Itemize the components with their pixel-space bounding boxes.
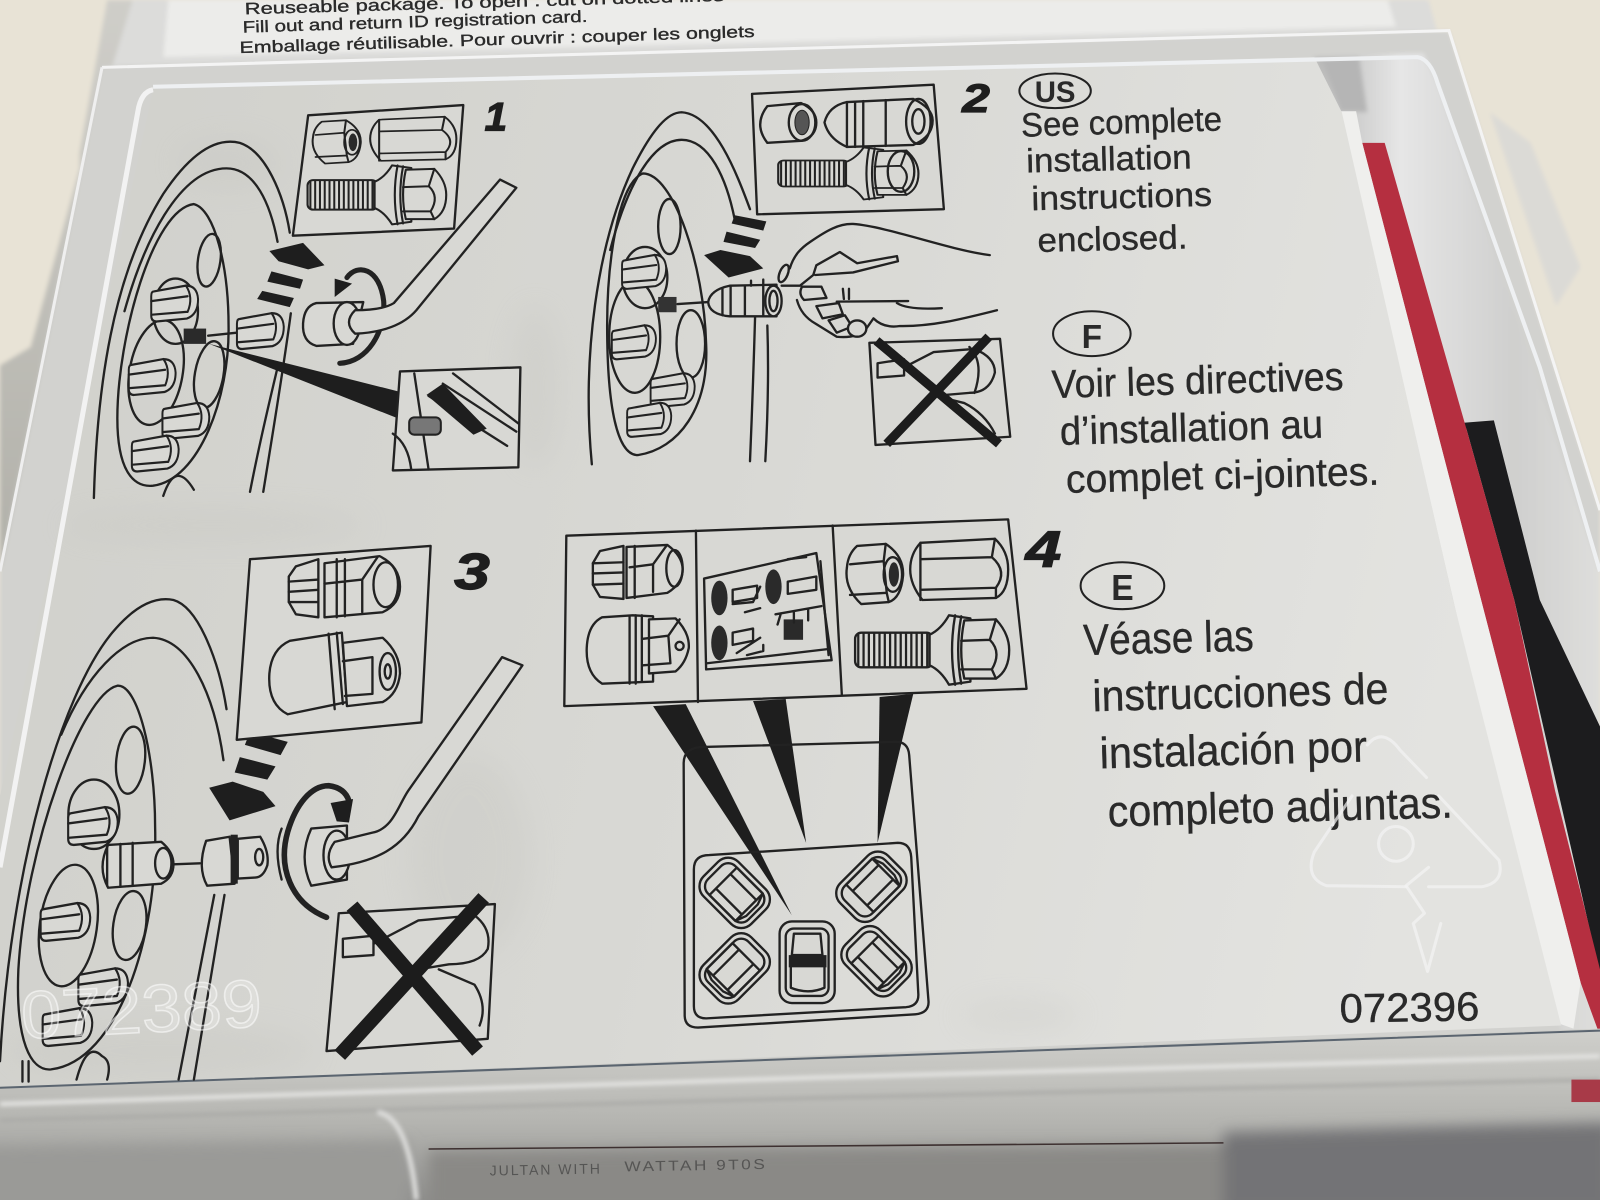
instruction booklet xyxy=(704,553,832,669)
badge: F xyxy=(1053,311,1131,356)
plastic edge highlights xyxy=(0,31,1600,867)
Spanish instructions: Véase las xyxy=(1083,612,1254,665)
badge: US: US xyxy=(1035,76,1076,109)
band edge highlight xyxy=(0,1031,1600,1088)
inset: key parts xyxy=(237,546,431,740)
pointer to detail xyxy=(209,344,400,418)
French instructions: complet ci-jointes. xyxy=(1065,450,1380,502)
step number 2: 2 xyxy=(961,77,990,121)
stud and lock xyxy=(658,280,782,316)
panel 2: install new lock by hand xyxy=(589,77,1010,464)
English instructions: installation xyxy=(1026,139,1192,180)
inset: lock parts xyxy=(752,85,944,214)
lower plastic band xyxy=(0,1029,1600,1200)
Spanish instructions: instalación por xyxy=(1099,722,1368,778)
arrow: outward xyxy=(257,243,324,307)
paper mottling xyxy=(10,139,1082,1078)
second paper sheet xyxy=(1341,111,1581,1029)
Spanish instructions: completo adjuntas. xyxy=(1107,779,1453,837)
band streaks and dark label strip xyxy=(0,1056,1600,1200)
panel 4: store key and parts xyxy=(564,519,1061,1028)
badge: F: F xyxy=(1082,319,1102,356)
French instructions xyxy=(1051,311,1380,502)
panel 3: tighten lock with key xyxy=(0,543,522,1082)
Spanish instructions xyxy=(1081,562,1453,837)
arrow: inward xyxy=(209,732,288,820)
step number 4: 4 xyxy=(1024,520,1061,577)
bottom label text seen through plastic: JULTAN WITH xyxy=(490,1162,602,1180)
French instructions: Voir les directives xyxy=(1051,355,1344,407)
wrench with socket xyxy=(303,180,516,363)
no impact wrench xyxy=(327,898,495,1055)
panel 1: remove factory lug nut xyxy=(94,96,520,498)
black package behind xyxy=(1454,420,1600,974)
removed lug and stud xyxy=(184,313,284,349)
English instructions: enclosed. xyxy=(1037,219,1188,260)
top sheet text xyxy=(239,0,755,57)
wheel 3 xyxy=(0,599,227,1082)
red backing strip xyxy=(1362,143,1600,1036)
bottom label text seen through plastic xyxy=(490,1157,767,1180)
part number: 072396 xyxy=(1339,984,1480,1031)
badge: E: E xyxy=(1111,568,1134,608)
English instructions: See complete xyxy=(1021,101,1223,145)
step number 3: 3 xyxy=(454,543,490,600)
step number 1: 1 xyxy=(485,96,507,140)
embossed recycling triangle xyxy=(1311,737,1500,971)
top sheet text: Fill out and return ID registration card. xyxy=(242,8,588,37)
inset: wheel detail xyxy=(393,367,520,470)
arrow: inward xyxy=(704,215,766,278)
top sheet text: Emballage réutilisable. Pour ouvrir : couper les onglets xyxy=(239,23,755,57)
Spanish instructions: instrucciones de xyxy=(1092,664,1389,721)
bottom label text seen through plastic: WATTAH 9T0S xyxy=(624,1157,767,1175)
hand xyxy=(776,224,997,337)
embossed mold number: 072389 xyxy=(19,966,264,1054)
lock on stud with key xyxy=(103,835,268,888)
English instructions xyxy=(1019,73,1223,260)
wrench with rotation arrow xyxy=(278,657,522,917)
parts strip xyxy=(564,519,1027,706)
French instructions: d’installation au xyxy=(1059,403,1324,454)
inset: parts xyxy=(293,105,463,236)
wheel 2 xyxy=(589,112,768,464)
badge: E xyxy=(1081,562,1164,609)
badge: US xyxy=(1019,73,1091,109)
pointers xyxy=(653,694,913,915)
wheel 1 xyxy=(94,142,291,498)
no impact wrench xyxy=(869,337,1010,445)
package container xyxy=(684,742,929,1028)
English instructions: instructions xyxy=(1031,177,1212,218)
